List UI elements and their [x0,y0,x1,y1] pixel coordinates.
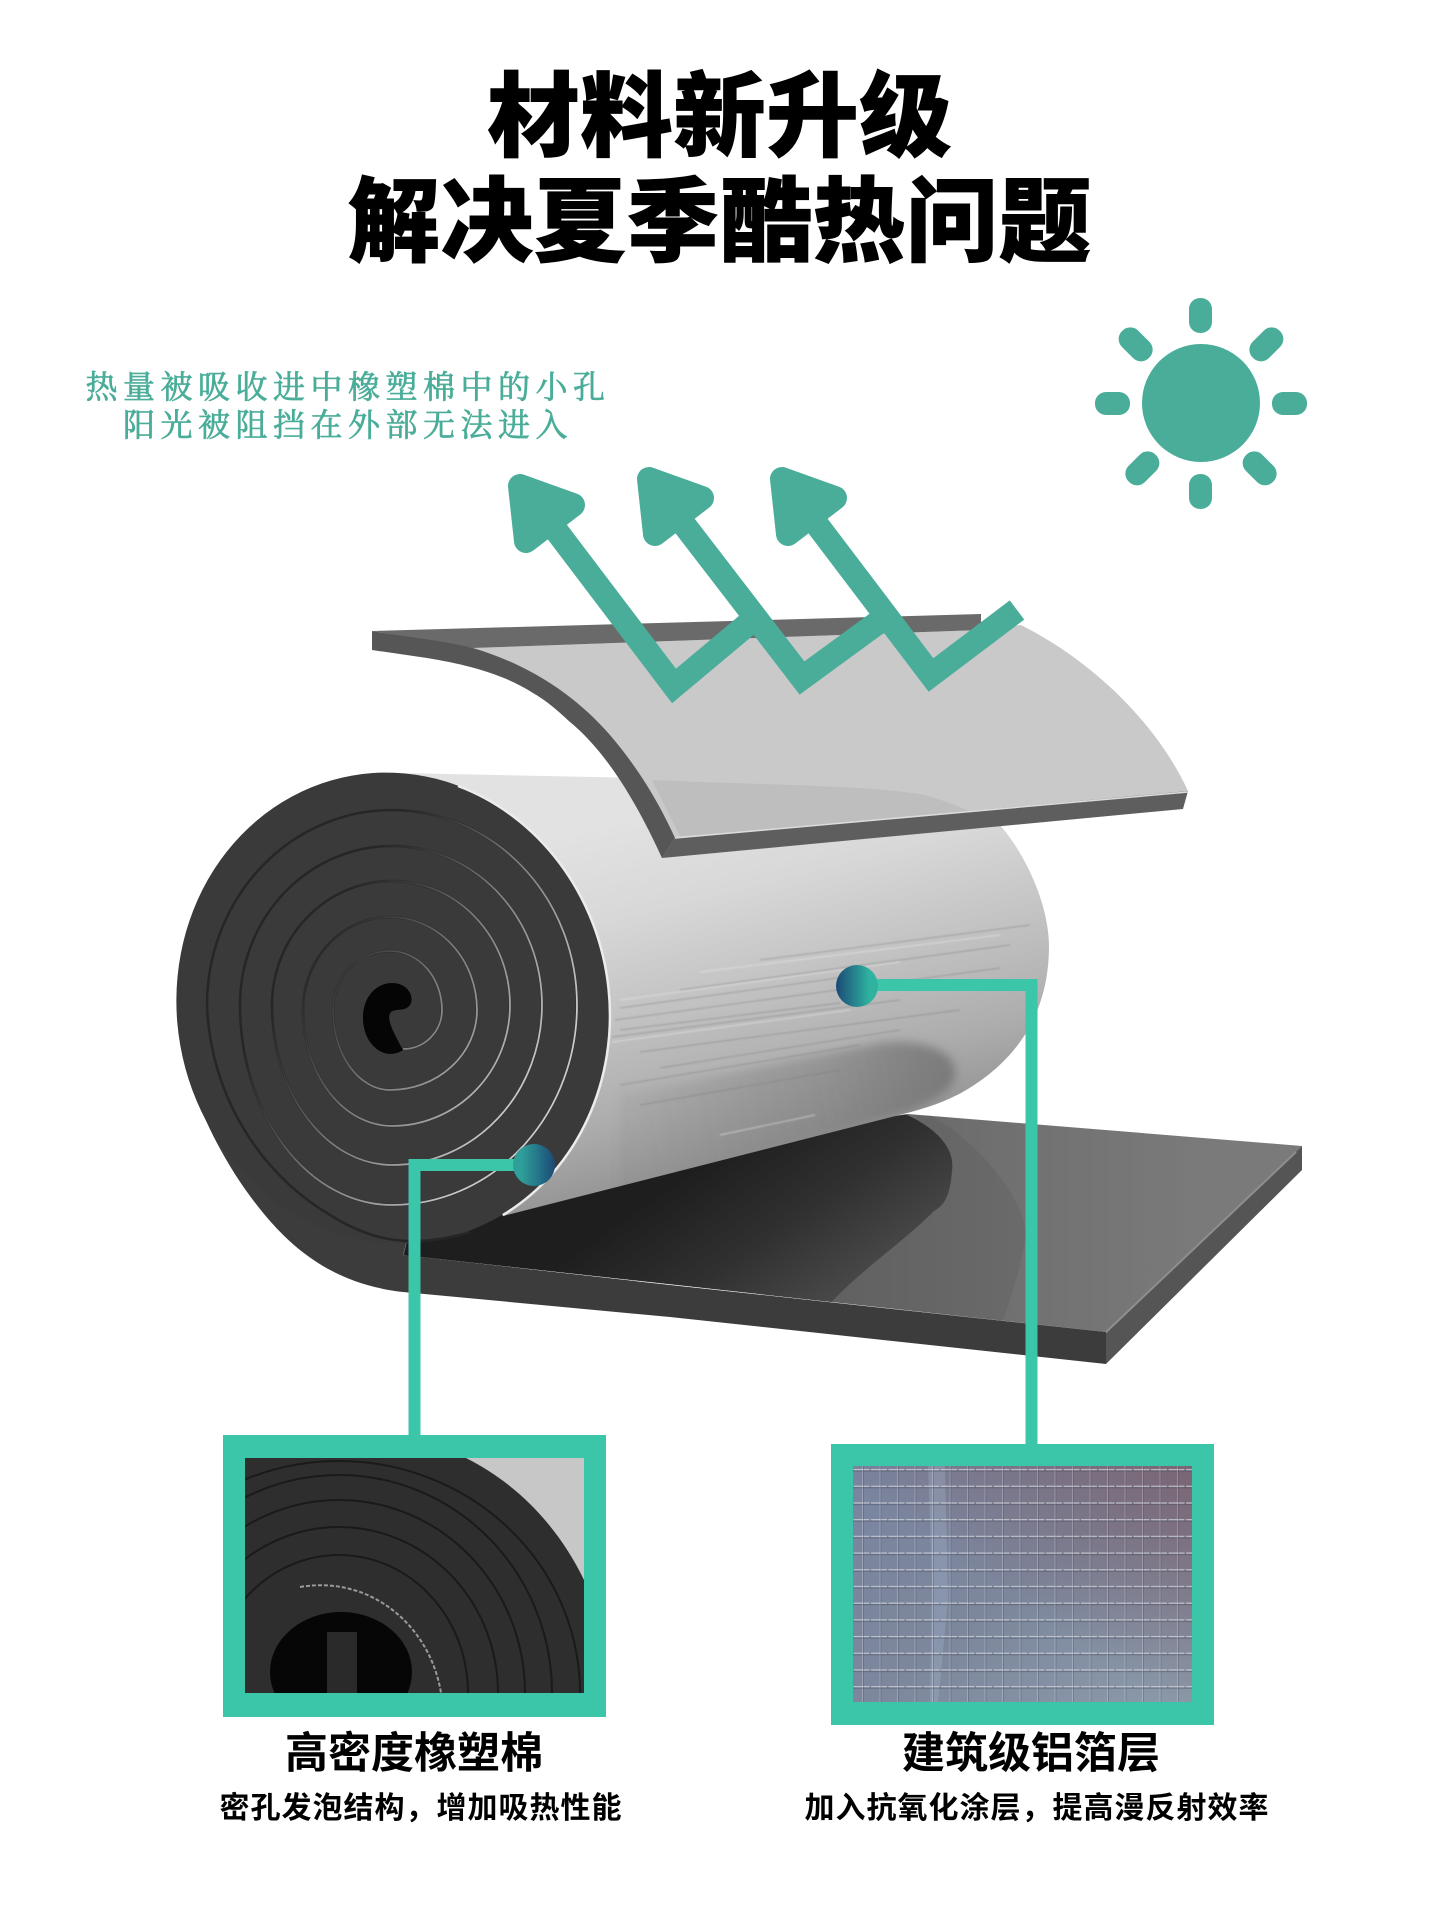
caption: heat and sunlight explanation: 阳光被阻挡在外部无法进入 [123,407,573,443]
panel: foam close-up [223,1435,606,1717]
title [348,67,1092,274]
infographic canvas [86,68,1307,1822]
panel: aluminium foil close-up [831,1444,1214,1725]
caption: heat and sunlight explanation [85,369,611,443]
roll outer wrap and front edge [178,1000,1106,1364]
product: insulation roll [139,614,1302,1364]
title: 解决夏季酷热问题 [348,172,1092,274]
bottom unrolled sheet [400,1114,1302,1364]
label: aluminium foil [804,1730,1270,1825]
roll end with spiral [139,738,647,1278]
title: 材料新升级 [487,67,953,169]
top peeled sheet [372,614,1188,858]
heat arrows zigzag [520,479,1017,686]
label: foam: 密孔发泡结构，增加吸热性能 [220,1792,622,1825]
icon: sun [1095,298,1307,509]
caption: heat and sunlight explanation: 热量被吸收进中橡塑棉中的小孔 [85,369,611,405]
roll aluminium surface [392,773,1049,1216]
callout: foam marker [414,1144,555,1435]
spiral seam [207,810,577,1241]
label: aluminium foil: 加入抗氧化涂层，提高漫反射效率 [804,1792,1270,1825]
core hole [363,983,412,1054]
label: aluminium foil: 建筑级铝箔层 [902,1730,1160,1778]
label: foam [220,1730,622,1825]
callout: aluminium foil marker [836,965,1032,1444]
label: foam: 高密度橡塑棉 [285,1730,543,1778]
